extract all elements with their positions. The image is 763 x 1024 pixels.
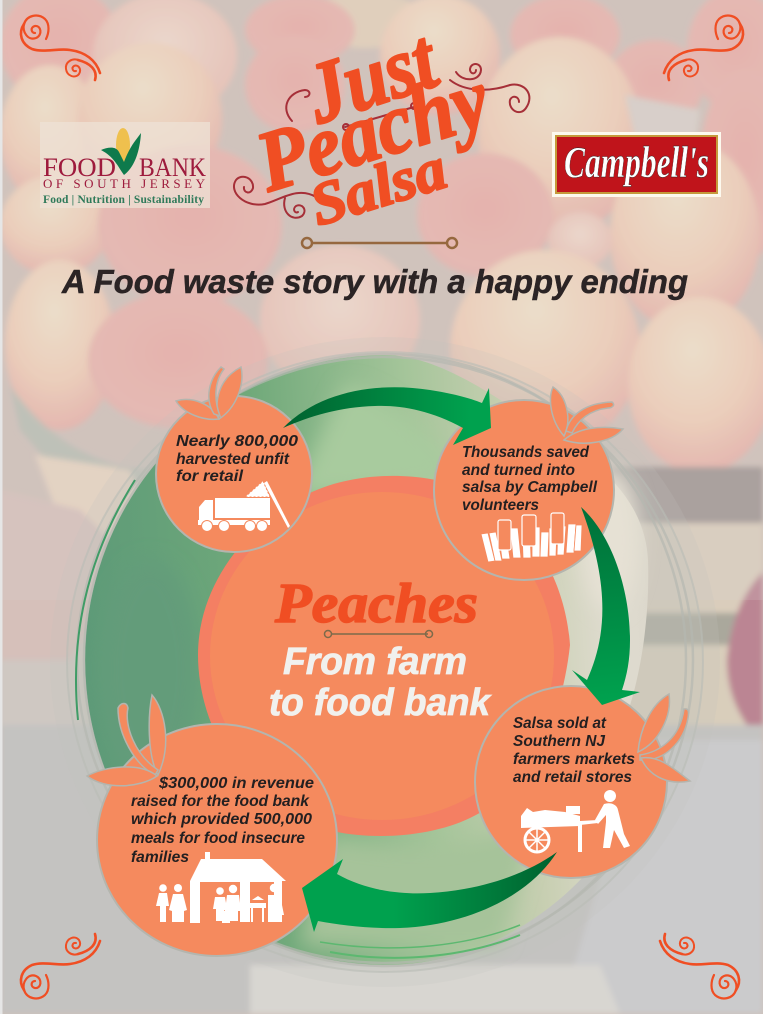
leaves	[638, 694, 690, 782]
peach 1: harvested unfit	[156, 367, 312, 552]
icon: person pushing cart	[521, 790, 630, 852]
central peach circle	[198, 476, 570, 836]
icon: dump truck	[198, 481, 290, 532]
text: Salsa sold at	[513, 715, 607, 732]
text: harvested unfit	[176, 451, 290, 468]
logo: Campbell's	[552, 132, 721, 197]
peach 2: thousands saved	[434, 387, 623, 580]
logo: Food Bank of South Jersey: Food | Nutrition | Sustainability	[43, 194, 204, 206]
icon: family and house	[156, 852, 286, 924]
icon: corn	[101, 128, 141, 175]
subtitle: A Food waste story with a happy ending	[61, 263, 688, 300]
text: families	[131, 849, 189, 866]
logo: Campbell's: Campbell's	[564, 138, 709, 187]
icon: jars	[481, 513, 582, 562]
logo: Food Bank of South Jersey	[40, 122, 210, 208]
text: meals for food insecure	[131, 830, 305, 847]
text: Nearly 800,000	[176, 433, 298, 450]
text	[176, 433, 298, 485]
title flourishes	[234, 64, 529, 218]
leaves	[87, 695, 166, 786]
arrow: salsa to market	[572, 507, 640, 705]
leaves	[551, 387, 623, 443]
divider	[324, 630, 432, 638]
text: which provided 500,000	[131, 811, 312, 828]
title: Just Peachy Salsa: Peachy	[245, 49, 500, 210]
text: volunteers	[462, 497, 539, 514]
text: salsa by Campbell	[462, 479, 598, 496]
frame line left	[0, 0, 2, 1014]
heading: From farm to food bank: to food bank	[269, 682, 492, 724]
leaves	[176, 367, 242, 419]
text: and turned into	[462, 462, 575, 479]
text	[513, 715, 635, 786]
peach 4: revenue	[87, 695, 337, 956]
green concentric circle	[50, 337, 720, 987]
text: $300,000 in revenue	[158, 775, 314, 792]
arrow: unfit to salsa	[283, 387, 491, 445]
title: Just Peachy Salsa: Just	[293, 10, 450, 142]
text: raised for the food bank	[131, 793, 310, 810]
title: Just Peachy Salsa	[245, 10, 500, 238]
text: Southern NJ	[513, 733, 605, 750]
corner flourish bottom left	[21, 934, 100, 998]
white margin bottom	[0, 1014, 763, 1024]
corner flourish bottom right	[660, 934, 739, 998]
heading: Peaches: Peaches	[274, 573, 478, 635]
logo: Food Bank of South Jersey: OF SOUTH JERSEY	[43, 176, 206, 191]
text: Thousands saved	[462, 444, 590, 461]
arrow: market to food bank	[302, 852, 557, 932]
title underline divider	[302, 238, 457, 248]
heading: From farm to food bank: From farm	[283, 641, 467, 683]
text: farmers markets	[513, 751, 635, 768]
heading: From farm to food bank	[269, 641, 492, 724]
corner flourish top left	[21, 16, 100, 80]
corner flourish top right	[664, 16, 743, 80]
text	[131, 775, 314, 866]
text	[462, 444, 598, 514]
logo: Food Bank of South Jersey: FOOD	[43, 153, 116, 182]
title: Just Peachy Salsa: Salsa	[303, 135, 454, 238]
logo: Food Bank of South Jersey: BANK	[139, 153, 206, 182]
text: for retail	[176, 468, 244, 485]
text: and retail stores	[513, 769, 632, 786]
peach 3: salsa sold	[475, 686, 690, 878]
